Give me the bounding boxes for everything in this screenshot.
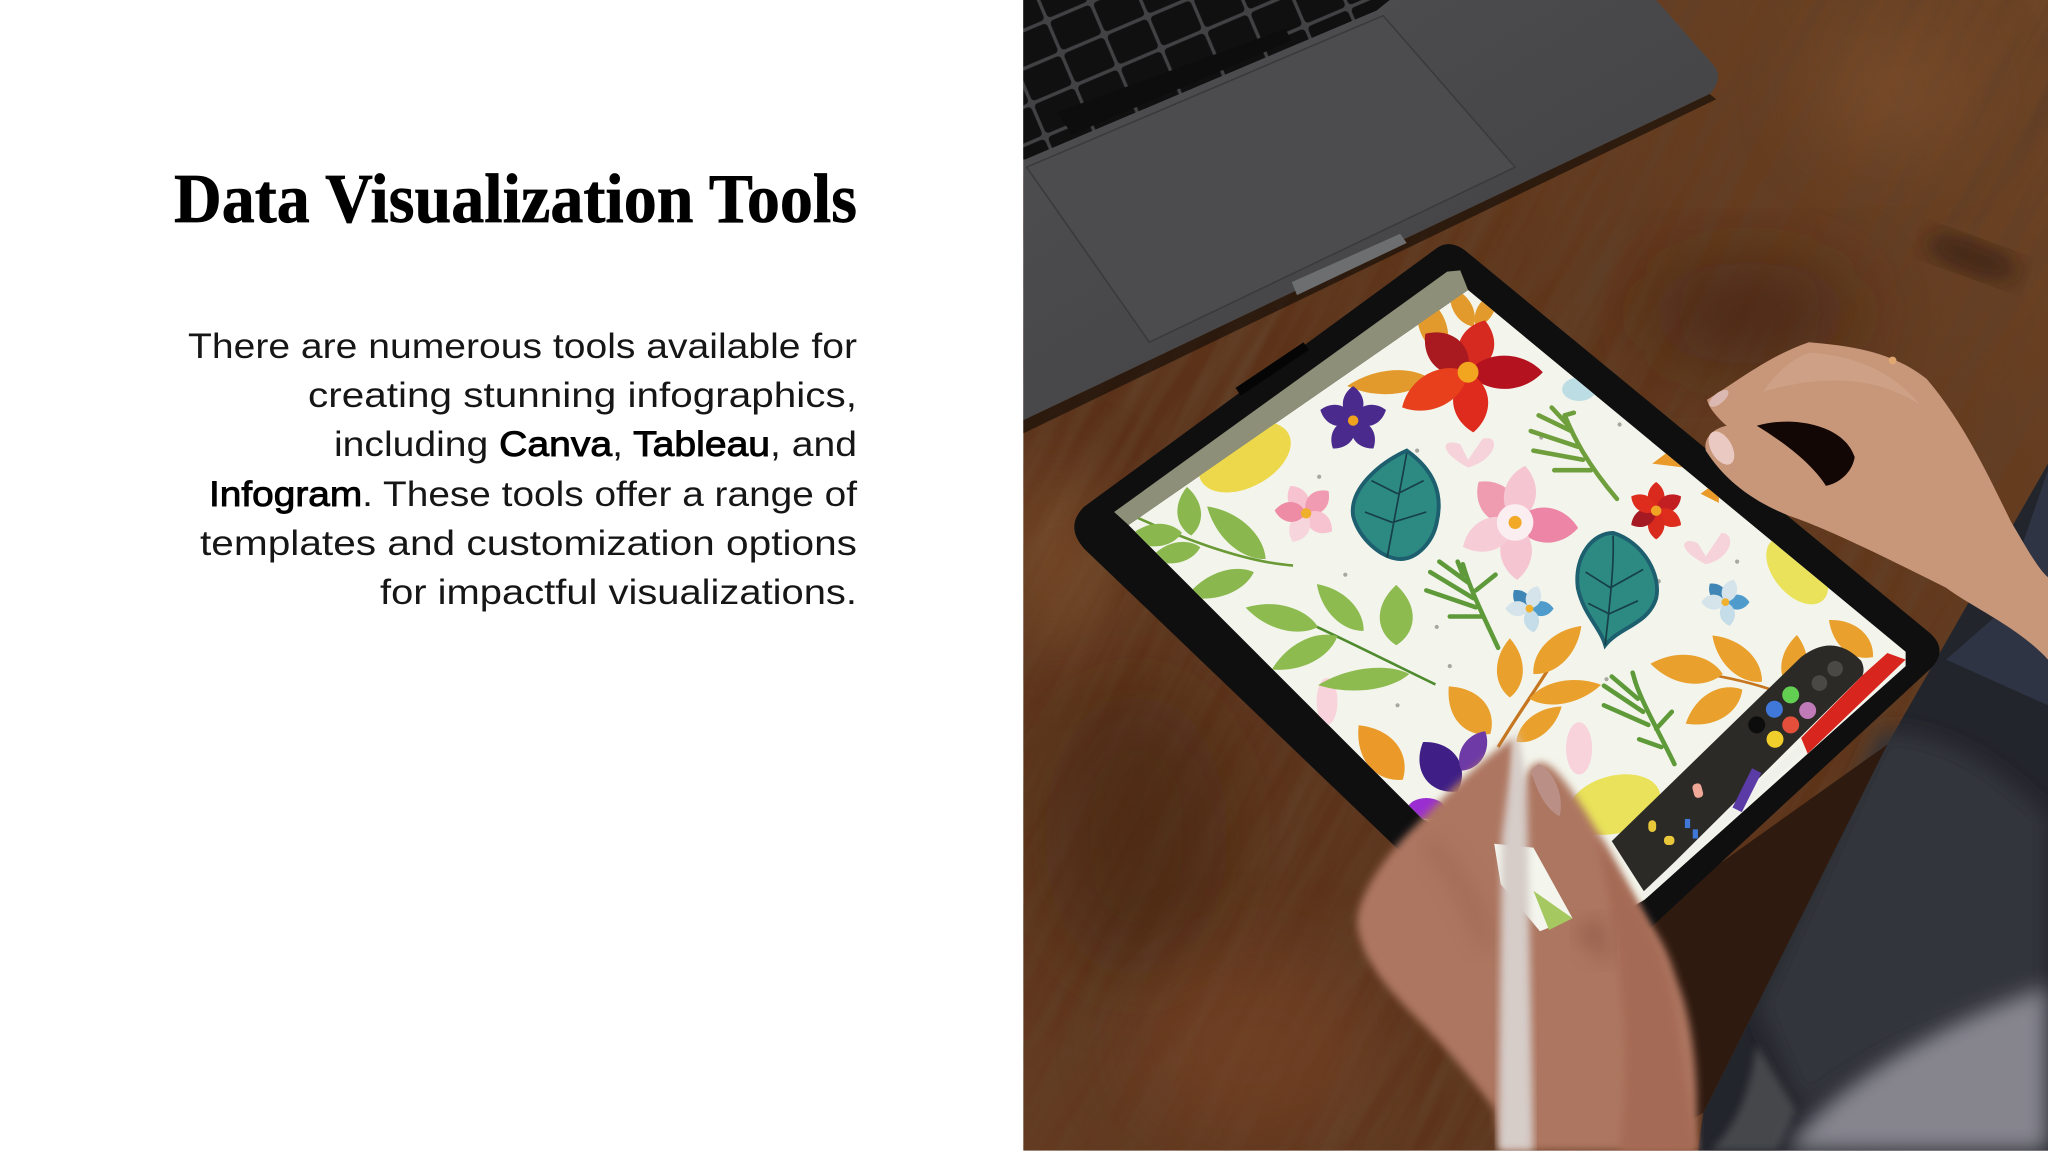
green leaf sprig centre: [1243, 576, 1435, 696]
orange sprig centre: [1436, 617, 1603, 750]
photo: tablet on a wooden desk: [1006, 0, 2048, 1151]
stylus pencil: [1498, 726, 1533, 1151]
butterflies and pale accents: [1317, 377, 1730, 775]
shaded desk edge beside the tablet: [1648, 744, 1887, 1123]
stylus on laptop edge: [1292, 234, 1407, 295]
yellow leaf: [1187, 407, 1303, 507]
keyboard space bar: [1066, 32, 1288, 128]
blue flowers: [1505, 577, 1750, 634]
finger crease shadows: [1574, 914, 1613, 967]
yellow leaves: [1562, 526, 1840, 844]
wooden desk: [1006, 0, 2048, 1151]
small pink flower: [1274, 481, 1338, 546]
pattern: lower half: [1243, 444, 1881, 844]
title: Data Visualization Tools: [174, 161, 857, 238]
clothing and lap under the desk: [1648, 464, 2048, 1151]
text block: description: including Canva , Tableau , and: [334, 425, 857, 464]
laptop trackpad: [1027, 16, 1515, 342]
hand holding the pencil: [1357, 726, 1697, 1151]
orange corner accents: [1652, 444, 1719, 503]
red flower: [1402, 320, 1543, 432]
purple flower: [1320, 386, 1386, 448]
text block: description: There are numerous tools available for: [188, 327, 857, 366]
text block: description: creating stunning infographics,: [308, 376, 857, 415]
text block: description: for impactful visualizations.: [380, 573, 857, 612]
hand resting on the tablet: [1703, 342, 2048, 660]
purple and orange bottom leaves: [1345, 714, 1495, 819]
teal leaf one: [1353, 451, 1439, 559]
drawing app toolbar: [1612, 645, 1906, 896]
laptop: [1023, 0, 1718, 434]
grey paper dots: [1317, 422, 1739, 707]
tablet camera notch: [1236, 342, 1309, 396]
text block: description: Infogram . These tools offer a range of: [209, 475, 857, 514]
text block: description: [188, 327, 857, 612]
pattern: top left: [1127, 282, 1739, 775]
orange sprig right: [1649, 610, 1881, 736]
laptop keyboard: [1023, 0, 1390, 159]
watercolor pattern on tablet: [1127, 282, 1906, 896]
brush tool icons: [1648, 782, 1704, 845]
large pink flower: [1456, 463, 1580, 580]
teal leaf two: [1577, 533, 1657, 645]
color palette dots: [1748, 661, 1843, 748]
tablet screen: [1128, 290, 1906, 914]
small red flower: [1627, 482, 1685, 539]
tablet: [1074, 244, 2048, 1151]
green feather sprig right: [1604, 673, 1674, 764]
text block: description: templates and customization options: [200, 524, 857, 563]
orange leaves behind red flower: [1347, 294, 1494, 394]
green leaf sprig left: [1127, 486, 1293, 608]
green feather sprig middle: [1426, 562, 1498, 648]
green sprig feather top: [1531, 408, 1617, 499]
grey screen glare band: [1114, 270, 1468, 525]
